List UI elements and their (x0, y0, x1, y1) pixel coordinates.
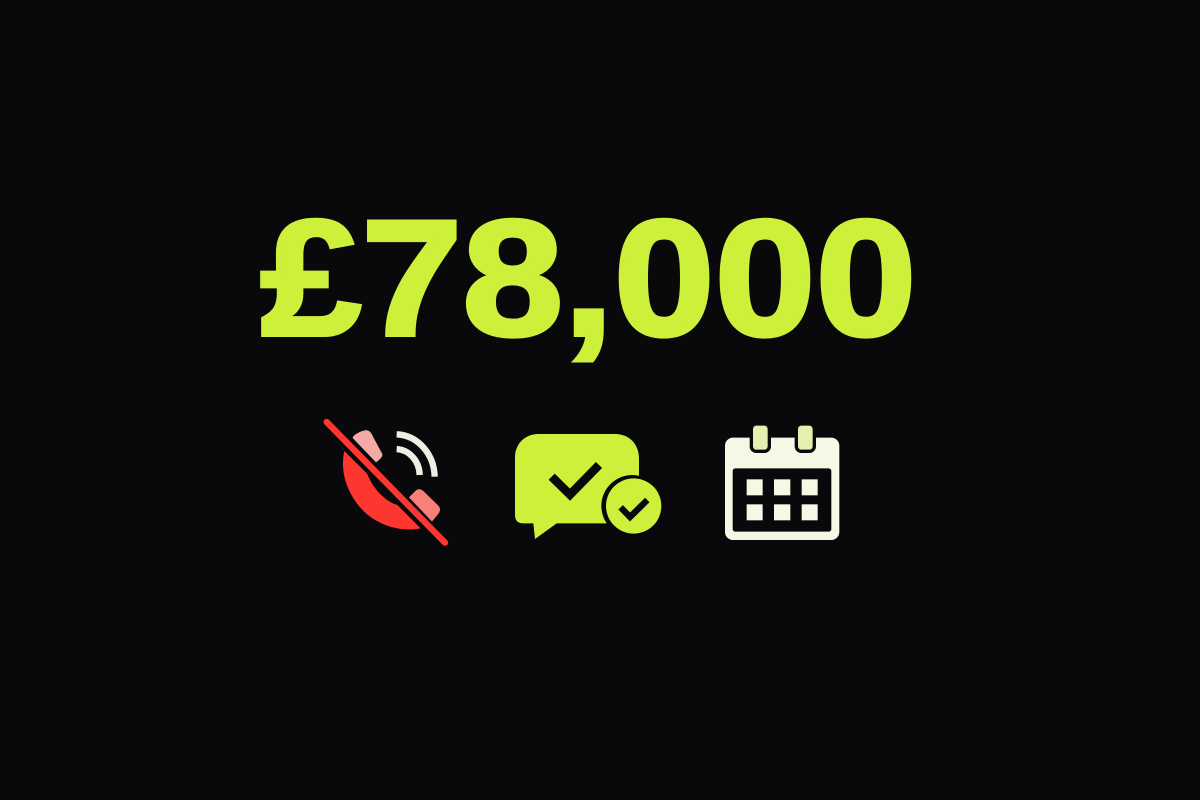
small check (621, 500, 647, 517)
signal waves (397, 434, 435, 477)
date grid panel (733, 468, 831, 532)
handset body (343, 451, 421, 529)
icon: calendar (725, 424, 839, 540)
slash (327, 422, 445, 543)
title: amount £78,000: £78,000 (260, 186, 916, 370)
calendar body (725, 438, 839, 540)
badge (606, 478, 661, 534)
badge ring (601, 475, 663, 537)
speech bubble (515, 434, 639, 539)
icon: chat bubble with checks (515, 434, 663, 539)
right ring (796, 424, 814, 451)
earpiece (353, 430, 382, 462)
icon: crossed-out phone (327, 422, 445, 543)
large check (552, 465, 599, 495)
date cells (747, 479, 818, 520)
left ring (751, 424, 769, 451)
mouthpiece (409, 489, 440, 522)
